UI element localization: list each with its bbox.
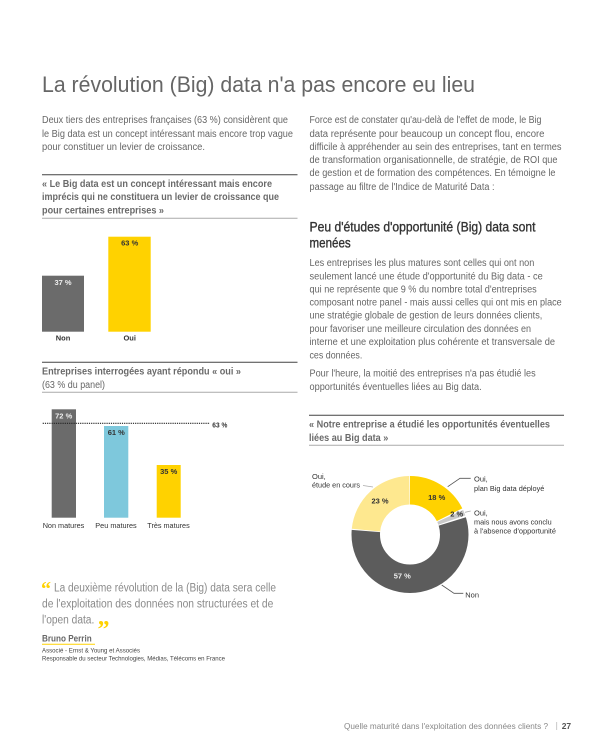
text block: intro right <box>310 115 562 193</box>
question heading 2: liées au Big data » <box>309 433 389 444</box>
attribution: Bruno Perrin: Responsable du secteur Technologies, Médias, Télécoms en France <box>42 656 225 663</box>
section heading: opportunity studies: menées <box>310 236 351 251</box>
text block: intro right: passage au filtre de l'Indice de Maturité Data : <box>310 182 494 193</box>
text block: opportunity studies body: seulement lancé une étude d'opportunité du Big data - ce <box>310 271 543 282</box>
donut chart: 57 % <box>394 571 411 580</box>
label: oui, plan Big data déployé: plan Big data déployé <box>474 484 544 493</box>
donut chart: 18 % <box>428 493 446 502</box>
label: oui, absence d'opportunité: à l'absence d'opportunité <box>474 526 556 535</box>
text block: intro right: de gestion et de formation des compétences. En témoigne le <box>310 168 556 179</box>
label: oui, étude en cours: Oui, <box>312 472 326 481</box>
bar chart: maturity: 72 % <box>55 412 73 420</box>
section heading: opportunity studies <box>310 220 536 251</box>
bar chart: maturity: 61 % <box>108 428 125 437</box>
section heading: opportunity studies: Peu d'études d'opportunité (Big) data sont <box>310 220 536 235</box>
callout: quotation <box>41 579 276 643</box>
bar chart: maturity <box>43 409 228 530</box>
heading: companies answering yes <box>42 366 241 391</box>
text block: opportunity studies body: une stratégie globale de gestion de leurs données clients, <box>310 311 542 322</box>
panel: survey question 1 <box>42 175 298 342</box>
label: oui, absence d'opportunité: mais nous avons conclu <box>474 517 552 526</box>
text block: intro right: difficile à appréhender au sein des entreprises, tant en termes <box>310 142 562 153</box>
text block: opportunity studies body: Les entreprises les plus matures sont celles qui ont non <box>310 258 534 269</box>
label: oui, plan Big data déployé: Oui, <box>474 475 488 484</box>
bar chart: non / oui: 37 % <box>54 278 72 287</box>
attribution: Bruno Perrin: Associé - Ernst & Young et Associés <box>42 647 141 654</box>
question heading 2: « Notre entreprise a étudié les opportunités éventuelles <box>309 420 550 430</box>
label: oui, absence d'opportunité: Oui, <box>474 509 488 518</box>
attribution: Bruno Perrin: Bruno Perrin <box>42 634 92 645</box>
bar chart: maturity: 35 % <box>160 467 178 476</box>
footer: running title and page number: Quelle maturité dans l'exploitation des données clients ? <box>344 721 548 731</box>
donut chart: 2 % <box>450 510 463 519</box>
bar chart: maturity: Non matures <box>43 521 85 530</box>
question heading 1: imprécis qui ne constituera un levier de croissance que <box>42 192 279 203</box>
text block: intro left: le Big data est un concept intéressant mais encore trop vague <box>42 129 293 140</box>
bar chart: non / oui: 63 % <box>121 238 139 248</box>
heading: companies answering yes: Entreprises interrogées ayant répondu « oui » <box>42 366 241 378</box>
callout: quotation: La deuxième révolution de la (Big) data sera celle <box>54 583 276 595</box>
panel: companies answering yes <box>42 362 298 530</box>
text block: intro left <box>42 115 293 153</box>
icon: opening quote: “ <box>41 579 51 601</box>
label: oui, étude en cours <box>312 472 373 490</box>
label: oui, étude en cours: étude en cours <box>312 481 360 490</box>
callout: quotation: de l'exploitation des données non structurées et de <box>42 599 273 611</box>
heading: companies answering yes: (63 % du panel) <box>42 380 105 391</box>
label: oui, absence d'opportunité <box>465 509 556 535</box>
footer: running title and page number: 27 <box>562 721 571 731</box>
text block: opportunity studies body <box>310 258 562 393</box>
question heading 1: pour certaines entreprises » <box>42 206 164 216</box>
donut chart <box>366 490 463 580</box>
bar chart: non / oui <box>42 237 151 342</box>
text block: intro right: de transformation organisationnelle, de stratégie, de ROI que <box>310 155 558 166</box>
bar chart: maturity: Peu matures <box>95 521 137 530</box>
text block: opportunity studies body: Pour l'heure, la moitié des entreprises n'a pas étudié les <box>310 369 536 380</box>
text block: intro right: data représente pour beaucoup un concept flou, encore <box>310 129 545 140</box>
text block: intro left: Deux tiers des entreprises françaises (63 %) considèrent que <box>42 115 288 126</box>
question heading 2 <box>309 420 550 444</box>
text block: opportunity studies body: ces données. <box>310 350 362 361</box>
text block: opportunity studies body: interne et une exploitation plus cohérente et transversale de <box>310 337 555 348</box>
icon: closing quote: ” <box>98 617 110 643</box>
bar chart: non / oui: Non <box>56 334 71 342</box>
question heading 1 <box>42 179 279 216</box>
label: non <box>442 585 479 600</box>
text block: opportunity studies body: pour favoriser une meilleure circulation des données en <box>310 324 531 335</box>
label: non: Non <box>465 591 479 600</box>
bar chart: non / oui: Oui <box>123 334 136 342</box>
callout: quotation: l'open data. <box>42 614 94 626</box>
text block: opportunity studies body: qui ne représente que 9 % du nombre total d'entreprises <box>310 284 537 295</box>
bar chart: maturity: Très matures <box>147 521 190 530</box>
bar chart: maturity: 63 % <box>212 420 228 430</box>
attribution: Bruno Perrin <box>42 634 225 663</box>
text block: intro left: pour constituer un levier de croissance. <box>42 142 205 153</box>
text block: intro right: Force est de constater qu'au-delà de l'effet de mode, le Big <box>310 115 542 126</box>
title: La révolution (Big) data n'a pas encore eu lieu <box>42 72 475 97</box>
donut chart: 23 % <box>371 496 389 505</box>
panel: survey question 2 <box>309 415 564 600</box>
question heading 1: « Le Big data est un concept intéressant mais encore <box>42 179 272 190</box>
text block: opportunity studies body: opportunités éventuelles liées au Big data. <box>310 382 482 393</box>
text block: opportunity studies body: composant notre panel - mais aussi celles qui ont mis en place <box>310 298 562 309</box>
label: oui, plan Big data déployé <box>448 475 544 493</box>
